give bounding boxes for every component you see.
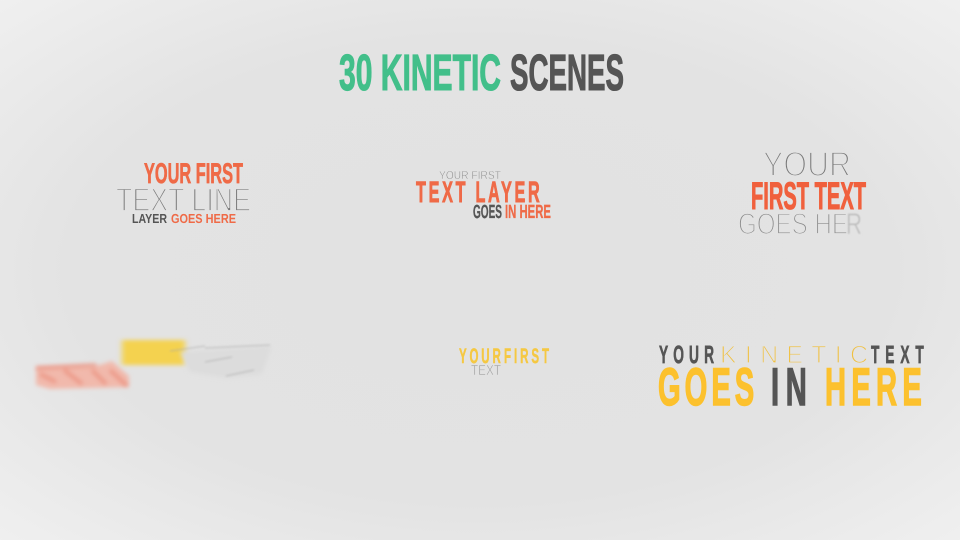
scene 6: your kinetic text goes in here: GOES: [658, 358, 754, 417]
scene 1: your first text line: TEXT LINE: [116, 181, 251, 218]
scene 4: motion-blurred text: [36, 340, 272, 389]
scene 1: your first text line: YOUR FIRST: [144, 158, 243, 190]
scene 6: your kinetic text goes in here: TEXT: [871, 341, 924, 369]
scene 3: your first text goes here: GOES HE: [738, 208, 848, 241]
yellow blur: [122, 340, 185, 365]
scene 6: your kinetic text goes in here: IN: [771, 358, 807, 417]
scene 6: your kinetic text goes in here: YOUR: [659, 341, 714, 369]
scene 3: your first text goes here: [738, 145, 866, 241]
scene 5: your first text: TEXT: [471, 363, 501, 379]
scene 6: your kinetic text goes in here: KINETIC: [720, 341, 868, 369]
red blur: [36, 361, 129, 389]
scene 3: your first text goes here: R: [846, 208, 862, 241]
scene 1: your first text line: GOES HERE: [171, 211, 236, 226]
scene 2: text layer goes in here: GOES: [473, 202, 502, 223]
scene 2: text layer goes in here: TEXT LAYER: [416, 176, 540, 209]
scene 2: text layer goes in here: IN HERE: [505, 202, 551, 223]
scene 1: your first text line: LAYER: [132, 211, 167, 226]
scene 2: text layer goes in here: [416, 170, 551, 223]
scene 6: your kinetic text goes in here: HERE: [825, 358, 922, 417]
grey blur: [170, 345, 272, 378]
scene 6: your kinetic text goes in here: [658, 341, 924, 417]
title: SCENES: [510, 44, 624, 101]
scene 5: your first text: YOUR: [459, 345, 501, 368]
scene 1: your first text line: [116, 158, 251, 226]
scene 2: text layer goes in here: YOUR FIRST: [439, 170, 501, 182]
scene 5: your first text: [459, 345, 549, 379]
scene 3: your first text goes here: YOUR: [763, 145, 851, 184]
title: 30 KINETIC: [339, 44, 501, 101]
scene 5: your first text: FIRST: [504, 345, 549, 368]
